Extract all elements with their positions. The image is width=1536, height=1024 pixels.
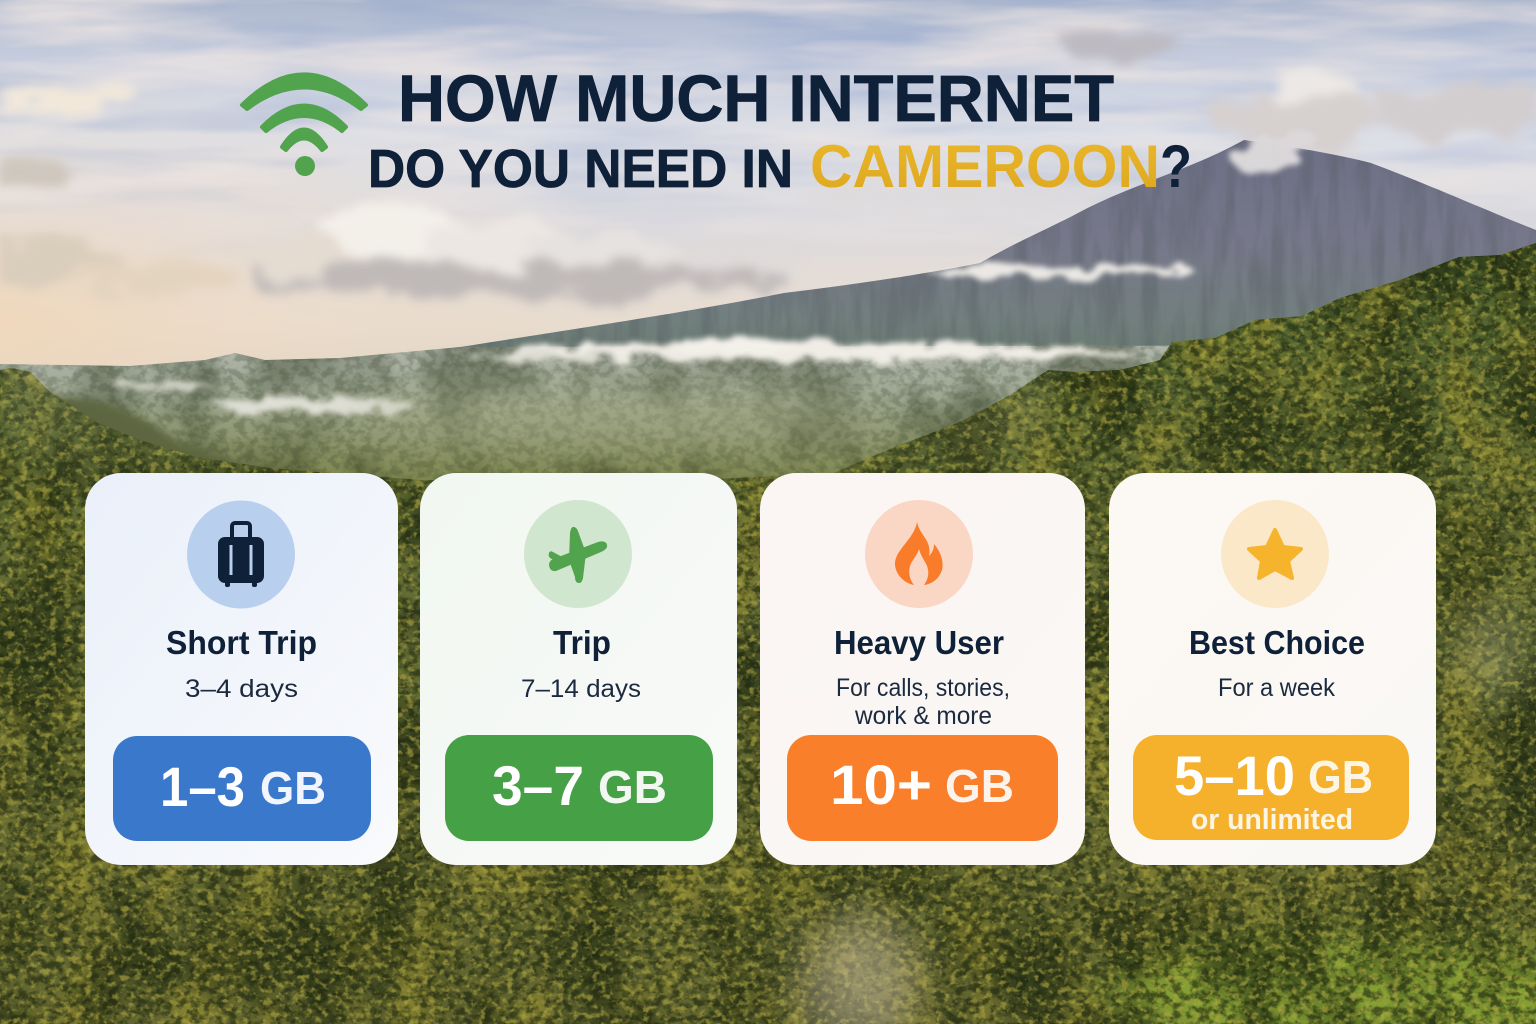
icon: wifi signal	[242, 74, 366, 176]
badge: 1-3 GB: 1–3	[160, 755, 245, 818]
text: duration: For a week	[1218, 674, 1335, 702]
label: trip: Trip	[553, 624, 611, 661]
badge: 3-7 GB	[445, 735, 713, 841]
text: duration: 3–4 days	[185, 675, 298, 703]
text: usage description	[836, 674, 1010, 730]
panel: best choice	[1109, 473, 1436, 865]
panel: trip	[420, 473, 737, 865]
valley floor	[0, 346, 1170, 480]
icon: airplane	[524, 500, 632, 608]
heading: Cameroon highlight: CAMEROON	[810, 133, 1160, 200]
label: best choice: Best Choice	[1189, 624, 1365, 661]
badge: 5-10 GB or unlimited	[1133, 735, 1409, 840]
badge: 3-7 GB: 3–7	[492, 754, 584, 817]
mountain	[460, 140, 1536, 347]
badge: 1-3 GB	[113, 736, 371, 841]
heading: question mark: ?	[1160, 133, 1192, 200]
text: duration: 7–14 days	[521, 675, 641, 703]
badge: 5-10 GB or unlimited: or unlimited	[1191, 804, 1353, 836]
icon: star	[1221, 500, 1329, 608]
text: usage description: For calls, stories,	[836, 674, 1010, 702]
badge: 5-10 GB or unlimited: 5–10	[1174, 744, 1295, 807]
panel: heavy user	[760, 473, 1085, 865]
heading: first line: HOW MUCH INTERNET	[398, 61, 1114, 135]
heading: second line: DO YOU NEED IN	[368, 139, 793, 199]
icon: flame	[865, 500, 973, 608]
panel: short trip	[85, 473, 398, 865]
badge: 10+ GB: GB	[945, 760, 1014, 812]
badge: 5-10 GB or unlimited: GB	[1308, 751, 1373, 803]
text: usage description: work & more	[854, 702, 992, 730]
icon: luggage	[187, 500, 295, 608]
label: short trip: Short Trip	[166, 624, 317, 661]
label: heavy user: Heavy User	[834, 624, 1004, 661]
title block	[242, 61, 1192, 200]
badge: 1-3 GB: GB	[260, 762, 326, 814]
badge: 10+ GB	[787, 735, 1058, 841]
badge: 10+ GB: 10+	[830, 753, 932, 816]
badge: 3-7 GB: GB	[598, 761, 667, 813]
